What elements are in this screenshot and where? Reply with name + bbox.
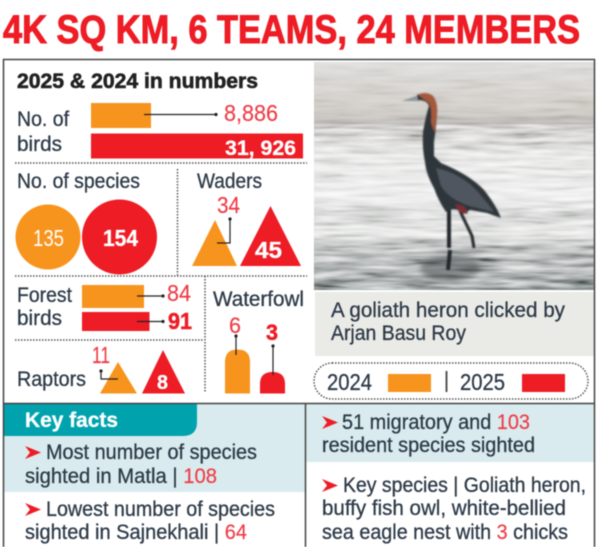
chart: number of species: 154 [103, 225, 138, 251]
fact: key species: sea eagle nest with 3 chicks [322, 520, 568, 544]
chart: number of birds: 31, 926 [225, 136, 296, 160]
chart: forest birds: birds [17, 306, 62, 330]
fact: most species [25, 440, 257, 488]
photo: goliath heron [314, 62, 594, 290]
heron reflection [420, 254, 480, 282]
chart: raptors: 11 [92, 342, 110, 368]
chart: number of birds: No. of [17, 107, 69, 131]
chart: number of birds: birds [17, 132, 62, 156]
chart: waterfowl: 6 [229, 313, 241, 338]
chart: number of birds: 8,886 [224, 100, 278, 126]
chart: forest birds [17, 280, 192, 334]
chart: forest birds: 91 [168, 308, 192, 334]
legend: 2025 [460, 369, 505, 395]
chart: waterfowl [213, 287, 304, 394]
legend: 2024 [327, 369, 372, 395]
fact: migratory and resident [322, 410, 535, 457]
chart: number of species: 135 [33, 225, 64, 251]
chart: waders: 45 [255, 237, 282, 263]
fact: lowest species: Lowest number of species [46, 497, 275, 521]
chart: waders: Waders [197, 169, 262, 193]
chart: waterfowl: Waterfowl [213, 287, 304, 311]
chart: number of species: No. of species [17, 169, 140, 193]
key facts tab: Key facts [25, 409, 118, 432]
fact: key species [322, 473, 586, 544]
fact: migratory and resident: 51 migratory and 103 [342, 410, 530, 434]
panel: key facts left [4, 404, 305, 544]
fact: lowest species [25, 497, 275, 544]
chart: forest birds: 84 [167, 280, 191, 306]
panel heading: 2025 & 2024 in numbers [17, 70, 258, 93]
caption: A goliath heron clicked by [331, 298, 565, 322]
fact: most species: Most number of species [46, 440, 257, 464]
fact: most species: sighted in Matla | 108 [25, 464, 217, 488]
fact: key species: buffy fish owl, white-bellied [322, 496, 566, 520]
chart: raptors: Raptors [17, 367, 86, 391]
chart: waders: 34 [217, 192, 240, 218]
caption [315, 292, 594, 356]
caption: Arjan Basu Roy [331, 321, 466, 345]
chart: forest birds: Forest [17, 283, 72, 307]
chart: number of birds [17, 100, 303, 160]
fact: lowest species: sighted in Sajnekhali | 64 [25, 520, 247, 544]
key facts tab [4, 404, 197, 436]
chart: waterfowl: 3 [266, 320, 278, 345]
chart: raptors: 8 [157, 372, 168, 394]
heron [402, 93, 501, 270]
legend [314, 363, 588, 399]
chart: raptors [17, 342, 185, 394]
panel: key facts right [306, 404, 594, 544]
fact: migratory and resident: resident species sighted [322, 433, 535, 457]
chart: waders [192, 169, 301, 266]
chart: number of species [16, 169, 157, 274]
